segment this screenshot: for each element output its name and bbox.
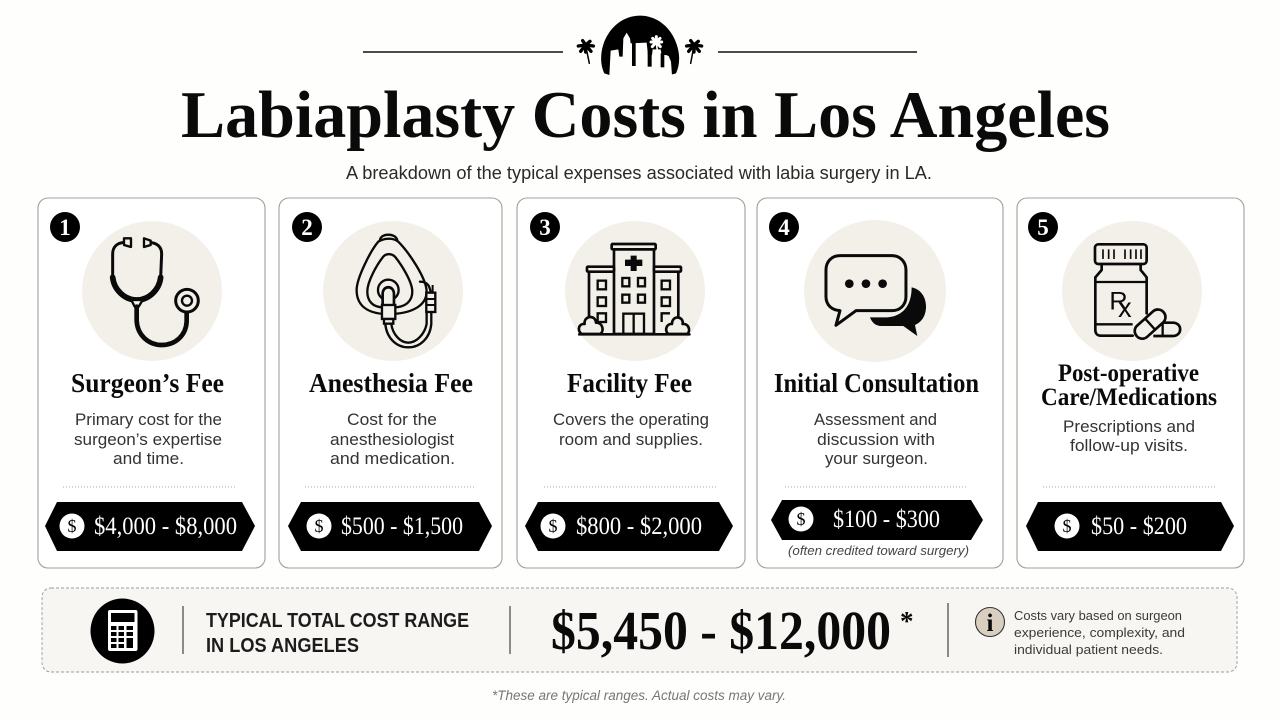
number badge 4: [769, 212, 799, 242]
description: [74, 411, 222, 468]
price tag: [1026, 502, 1234, 551]
price tag: [288, 502, 492, 551]
number badge 3: [530, 212, 560, 242]
icon: anesthesia mask: [357, 235, 435, 347]
description: surgeon’s expertise: [74, 431, 222, 449]
icon: stethoscope: [113, 238, 198, 345]
number badge 4: 4: [778, 215, 790, 240]
number badge 5: [1028, 212, 1058, 242]
number badge 2: 2: [301, 215, 313, 240]
price tag: [771, 500, 983, 540]
description: Assessment and: [814, 411, 937, 429]
card heading: Facility Fee: [567, 368, 692, 398]
price tag: $800 - $2,000: [576, 513, 702, 540]
panel: surgeon's fee: [38, 198, 265, 568]
card heading: Initial Consultation: [774, 368, 979, 398]
price tag: [45, 502, 255, 551]
description: Primary cost for the: [75, 411, 222, 429]
description: discussion with: [817, 431, 935, 449]
description: follow-up visits.: [1070, 437, 1188, 455]
description: room and supplies.: [559, 431, 703, 449]
number badge 1: [50, 212, 80, 242]
total label: IN LOS ANGELES: [206, 635, 359, 657]
icon: speech bubbles: [826, 256, 926, 336]
subtitle: A breakdown of the typical expenses associated with labia surgery in LA.: [346, 163, 932, 183]
description: and medication.: [330, 450, 455, 468]
number badge 3: 3: [539, 215, 551, 240]
description: Cost for the: [347, 411, 437, 429]
price tag: $: [1062, 516, 1072, 536]
price tag: $50 - $200: [1091, 513, 1187, 540]
price tag: $: [548, 516, 558, 536]
card heading: Anesthesia Fee: [309, 368, 473, 398]
price note: (often credited toward surgery): [788, 543, 969, 558]
note: experience, complexity, and: [1014, 625, 1185, 640]
total label: [206, 610, 469, 657]
price tag: $: [796, 509, 806, 529]
total value: $5,450 - $12,000: [551, 600, 891, 661]
card heading: [1041, 360, 1217, 411]
icon: prescription bottle and pills: x: [1118, 292, 1132, 323]
total label: TYPICAL TOTAL COST RANGE: [206, 610, 469, 632]
price tag: $4,000 - $8,000: [94, 513, 237, 540]
title: Labiaplasty Costs in Los Angeles: [181, 78, 1110, 152]
number badge 5: 5: [1037, 215, 1049, 240]
description: your surgeon.: [825, 450, 928, 468]
note: individual patient needs.: [1014, 642, 1163, 657]
panel: initial consultation: [757, 198, 1003, 568]
description: Covers the operating: [553, 411, 709, 429]
icon: calculator: [90, 598, 154, 664]
icon: info: i: [987, 610, 994, 637]
description: and time.: [113, 450, 184, 468]
number badge 2: [292, 212, 322, 242]
total value: *: [900, 606, 914, 636]
card heading: Post-operative: [1058, 360, 1199, 387]
panel: facility fee: [517, 198, 745, 568]
price tag: [525, 502, 733, 551]
note: [1014, 608, 1185, 657]
footnote: *These are typical ranges. Actual costs may vary.: [492, 688, 786, 703]
panel: post-operative care: [1017, 198, 1244, 568]
number badge 1: 1: [59, 215, 71, 240]
icon: hospital building: [579, 244, 689, 334]
header emblem: LA skyline with palms and rules: [363, 16, 917, 75]
description: [814, 411, 937, 468]
icon: info: [976, 608, 1004, 637]
panel: anesthesia fee: [279, 198, 502, 568]
card heading: Surgeon’s Fee: [71, 368, 224, 398]
description: Prescriptions and: [1063, 418, 1195, 436]
price tag: $500 - $1,500: [341, 513, 463, 540]
price tag: $: [68, 516, 76, 536]
icon: prescription bottle and pills: R: [1109, 288, 1128, 316]
price tag: $: [314, 516, 324, 536]
description: [1063, 418, 1195, 455]
description: [553, 411, 709, 449]
price tag: $100 - $300: [833, 506, 940, 533]
note: Costs vary based on surgeon: [1014, 608, 1182, 623]
card heading: Care/Medications: [1041, 384, 1217, 411]
icon: prescription bottle and pills: [1095, 244, 1180, 342]
panel: total cost summary: [42, 588, 1237, 672]
description: anesthesiologist: [330, 431, 454, 449]
description: [330, 411, 455, 468]
